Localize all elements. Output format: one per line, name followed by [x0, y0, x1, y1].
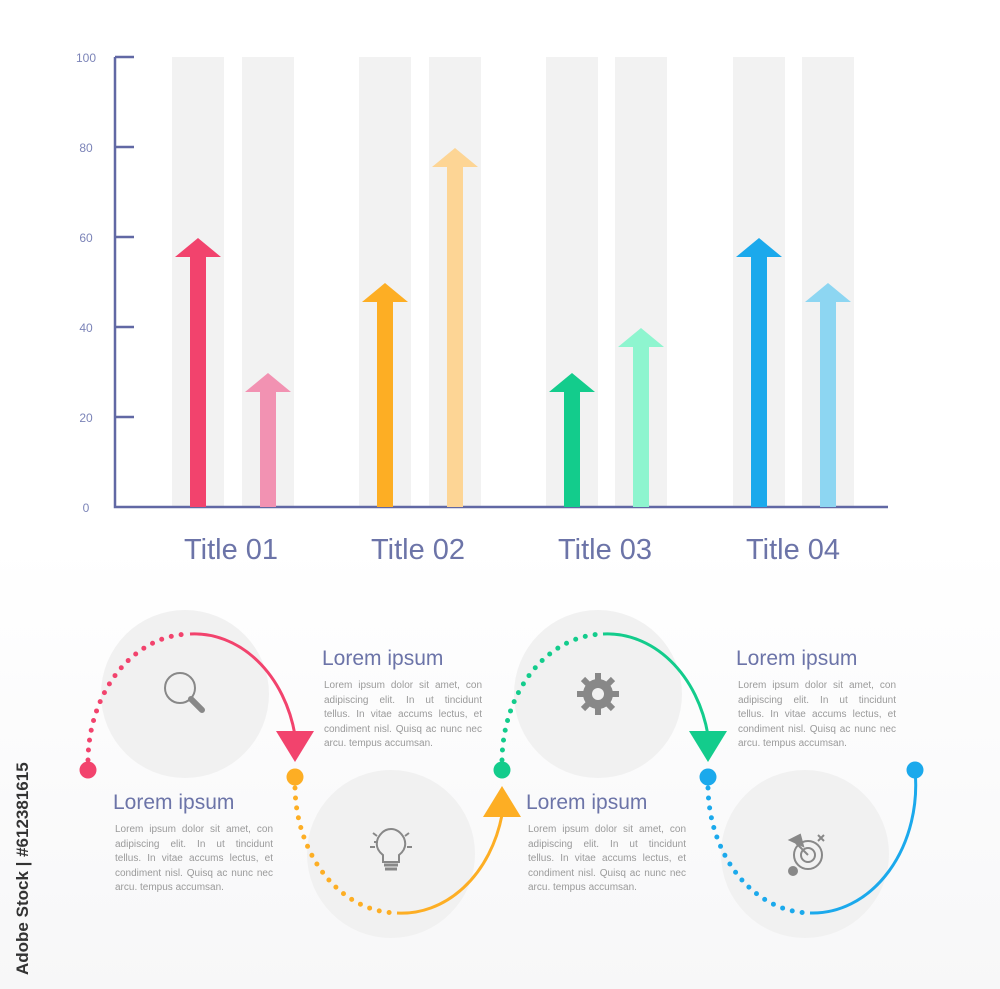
- text block 4: arcu. tempus accumsan.: [528, 882, 637, 893]
- text block 3: [736, 647, 896, 749]
- text block 2: arcu. tempus accumsan.: [115, 882, 224, 893]
- y-axis labels: [76, 51, 96, 515]
- text block 3: Lorem ipsum: [736, 647, 857, 670]
- text block 1: adipiscing elit. In ut tincidunt: [324, 695, 482, 706]
- text block 2: tellus. In vitae accums lectus, et: [115, 853, 273, 864]
- text block 4: [526, 791, 686, 893]
- y-axis labels: 60: [79, 231, 93, 245]
- y-axis labels: 80: [79, 141, 93, 155]
- watermark id: Adobe Stock | #612381615: [13, 762, 32, 975]
- text block 1: [322, 647, 482, 749]
- step circles: [101, 610, 889, 938]
- text block 4: Lorem ipsum: [526, 791, 647, 814]
- text block 1: Lorem ipsum dolor sit amet, con: [324, 680, 482, 691]
- category titles: Title 03: [558, 534, 652, 566]
- icon: target: [789, 835, 824, 875]
- category titles: Title 01: [184, 534, 278, 566]
- text block 2: [113, 791, 273, 893]
- text block 3: condiment nisl. Quisq ac nunc nec: [738, 724, 896, 735]
- category titles: Title 04: [746, 534, 840, 566]
- text block 4: Lorem ipsum dolor sit amet, con: [528, 824, 686, 835]
- y-axis labels: 20: [79, 411, 93, 425]
- flow arcs: [88, 634, 916, 913]
- text block 2: Lorem ipsum: [113, 791, 234, 814]
- text block 3: tellus. In vitae accums lectus, et: [738, 709, 896, 720]
- background columns: [172, 57, 854, 507]
- icon: bulb: [370, 829, 412, 869]
- axes: [115, 57, 888, 507]
- text block 3: Lorem ipsum dolor sit amet, con: [738, 680, 896, 691]
- y-axis labels: 0: [83, 501, 90, 515]
- text block 3: arcu. tempus accumsan.: [738, 738, 847, 749]
- text block 4: tellus. In vitae accums lectus, et: [528, 853, 686, 864]
- category titles: [184, 534, 840, 566]
- text block 1: Lorem ipsum: [322, 647, 443, 670]
- category titles: Title 02: [371, 534, 465, 566]
- text block 1: arcu. tempus accumsan.: [324, 738, 433, 749]
- text block 4: condiment nisl. Quisq ac nunc nec: [528, 868, 686, 879]
- text block 4: adipiscing elit. In ut tincidunt: [528, 839, 686, 850]
- arrowheads: [276, 731, 727, 817]
- text block 3: adipiscing elit. In ut tincidunt: [738, 695, 896, 706]
- icon: gear: [577, 673, 619, 715]
- y-axis labels: 40: [79, 321, 93, 335]
- text block 1: condiment nisl. Quisq ac nunc nec: [324, 724, 482, 735]
- text block 2: condiment nisl. Quisq ac nunc nec: [115, 868, 273, 879]
- text block 1: tellus. In vitae accums lectus, et: [324, 709, 482, 720]
- arrows: [175, 148, 851, 507]
- y-axis labels: 100: [76, 51, 96, 65]
- node dots: [80, 762, 924, 786]
- text block 2: adipiscing elit. In ut tincidunt: [115, 839, 273, 850]
- icon: magnifier: [165, 673, 202, 710]
- text block 2: Lorem ipsum dolor sit amet, con: [115, 824, 273, 835]
